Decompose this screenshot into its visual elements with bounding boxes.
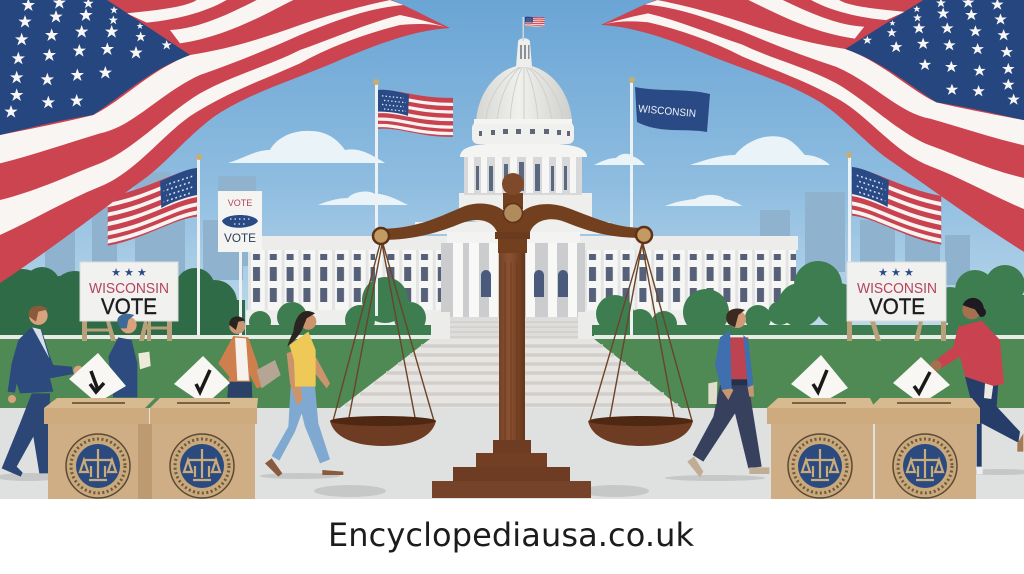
ballots right — [791, 355, 950, 404]
flag left — [108, 167, 197, 247]
sign: wisconsin vote right: ★ ★ ★ — [878, 267, 914, 279]
sign: wisconsin vote left: ★ ★ ★ — [111, 267, 147, 279]
ballot boxes right — [767, 398, 980, 499]
voters right — [687, 298, 1023, 477]
voters left — [2, 306, 343, 477]
sign: small vote — [218, 191, 262, 336]
upper steps — [445, 317, 580, 341]
portico — [441, 243, 585, 318]
drum and base — [459, 193, 592, 224]
dome flag — [525, 17, 544, 27]
lower steps — [340, 339, 681, 408]
man in suit — [2, 306, 83, 477]
ballot boxes left — [44, 398, 258, 499]
background sky — [0, 0, 1024, 340]
column — [495, 232, 530, 239]
flag centre left — [378, 89, 453, 138]
flagpole centre right — [629, 77, 635, 335]
base — [493, 440, 531, 454]
sign: wisconsin vote right — [847, 262, 946, 341]
person in orange jacket — [218, 316, 281, 398]
knobs — [373, 228, 389, 244]
sign: wisconsin vote left: VOTE — [101, 294, 157, 319]
flagpole right — [846, 152, 852, 336]
flagpole left — [196, 154, 202, 335]
top finial — [503, 193, 523, 209]
sign: wisconsin vote right: VOTE — [869, 294, 925, 319]
ballots left — [69, 353, 230, 405]
sign: wisconsin vote right: WISCONSIN — [857, 280, 937, 297]
woman in yellow top — [265, 311, 343, 477]
sign: wisconsin vote left — [80, 262, 178, 341]
skyline right — [760, 192, 970, 285]
man in blue jacket — [687, 309, 769, 477]
lantern — [516, 38, 532, 67]
trees right — [592, 261, 1024, 337]
large flag left — [0, 0, 450, 283]
dome flag pole — [522, 17, 524, 41]
strings — [333, 244, 692, 428]
sign: wisconsin vote left: WISCONSIN — [89, 280, 169, 297]
sign: small vote: VOTE — [228, 198, 252, 208]
flag: wisconsin — [635, 87, 710, 132]
footer caption: Encyclopediausa.co.uk — [328, 516, 694, 554]
dome — [476, 65, 572, 122]
skyline left — [45, 172, 256, 285]
capitol building — [245, 17, 798, 341]
trees near building left — [246, 277, 431, 336]
trees left — [0, 267, 245, 339]
pans — [330, 417, 436, 446]
sign: small vote: VOTE — [224, 231, 256, 245]
balance scale — [330, 173, 693, 498]
clouds — [228, 131, 830, 206]
large flag right — [601, 0, 1024, 252]
beam — [381, 204, 645, 240]
plinths — [431, 312, 595, 340]
person in red sweater — [931, 298, 1023, 474]
flag: wisconsin: WISCONSIN — [638, 103, 697, 120]
flag right — [852, 166, 941, 246]
wings — [245, 236, 798, 250]
flagpole centre left — [373, 79, 379, 316]
lawns — [0, 335, 1024, 408]
woman with cap — [108, 314, 151, 397]
pavement — [0, 408, 1024, 499]
ground shadows — [0, 469, 1024, 497]
